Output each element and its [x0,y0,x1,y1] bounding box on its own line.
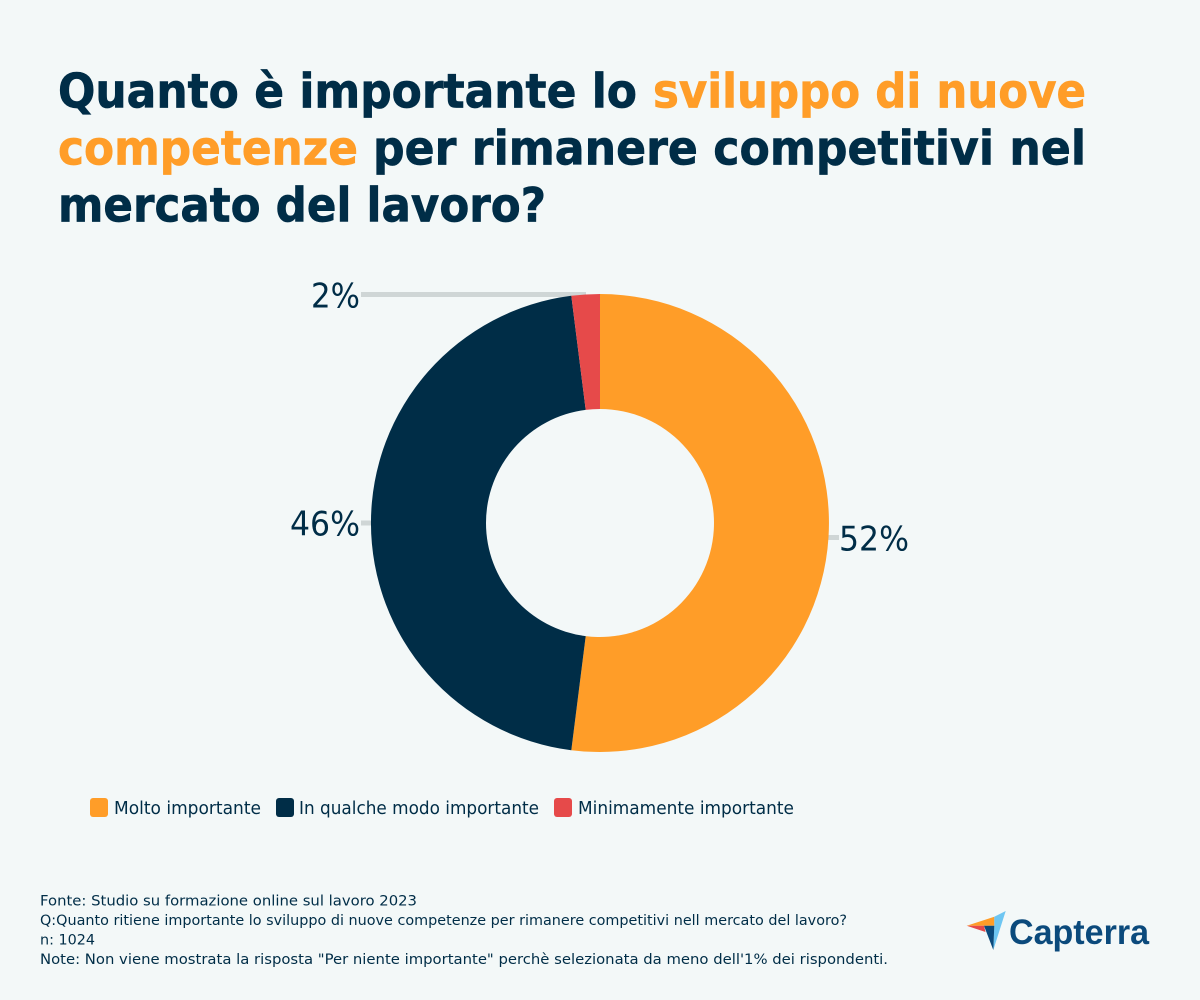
data labels [290,276,909,560]
title: per rimanere competitivi nel [373,122,1086,176]
slice: Molto importante 52% [571,294,829,752]
title: competenze [58,122,358,176]
slice: Minimamente importante 2% [571,294,600,410]
title: sviluppo di nuove [653,64,1086,120]
title: mercato del lavoro? [58,178,546,234]
legend item: Molto importante: Molto importante [114,799,261,819]
title: Quanto è importante lo [58,64,637,120]
donut chart [361,292,839,752]
source notes: Note: Non viene mostrata la risposta "Per niente importante" perchè selezionata da meno dell'1% dei rispondenti. [40,952,888,968]
logo: Capterra [967,911,1150,952]
legend item: In qualche modo importante: In qualche modo importante [299,799,539,819]
leader lines [361,292,839,540]
slice: In qualche modo importante 46% [371,296,586,750]
legend item: Minimamente importante: Minimamente importante [578,799,794,819]
data labels: 52% [839,520,909,560]
source notes: Q:Quanto ritiene importante lo sviluppo di nuove competenze per rimanere competitivi nell mercato del lavoro? [40,913,847,929]
source notes: Fonte: Studio su formazione online sul lavoro 2023 [40,894,417,910]
logo mark [967,911,1006,950]
data labels: 46% [290,504,360,544]
logo wordmark: Capterra [1009,913,1150,952]
title [58,64,1086,234]
data labels: 2% [311,276,360,316]
source notes: n: 1024 [40,932,95,948]
legend [90,798,794,819]
source notes [40,894,888,968]
